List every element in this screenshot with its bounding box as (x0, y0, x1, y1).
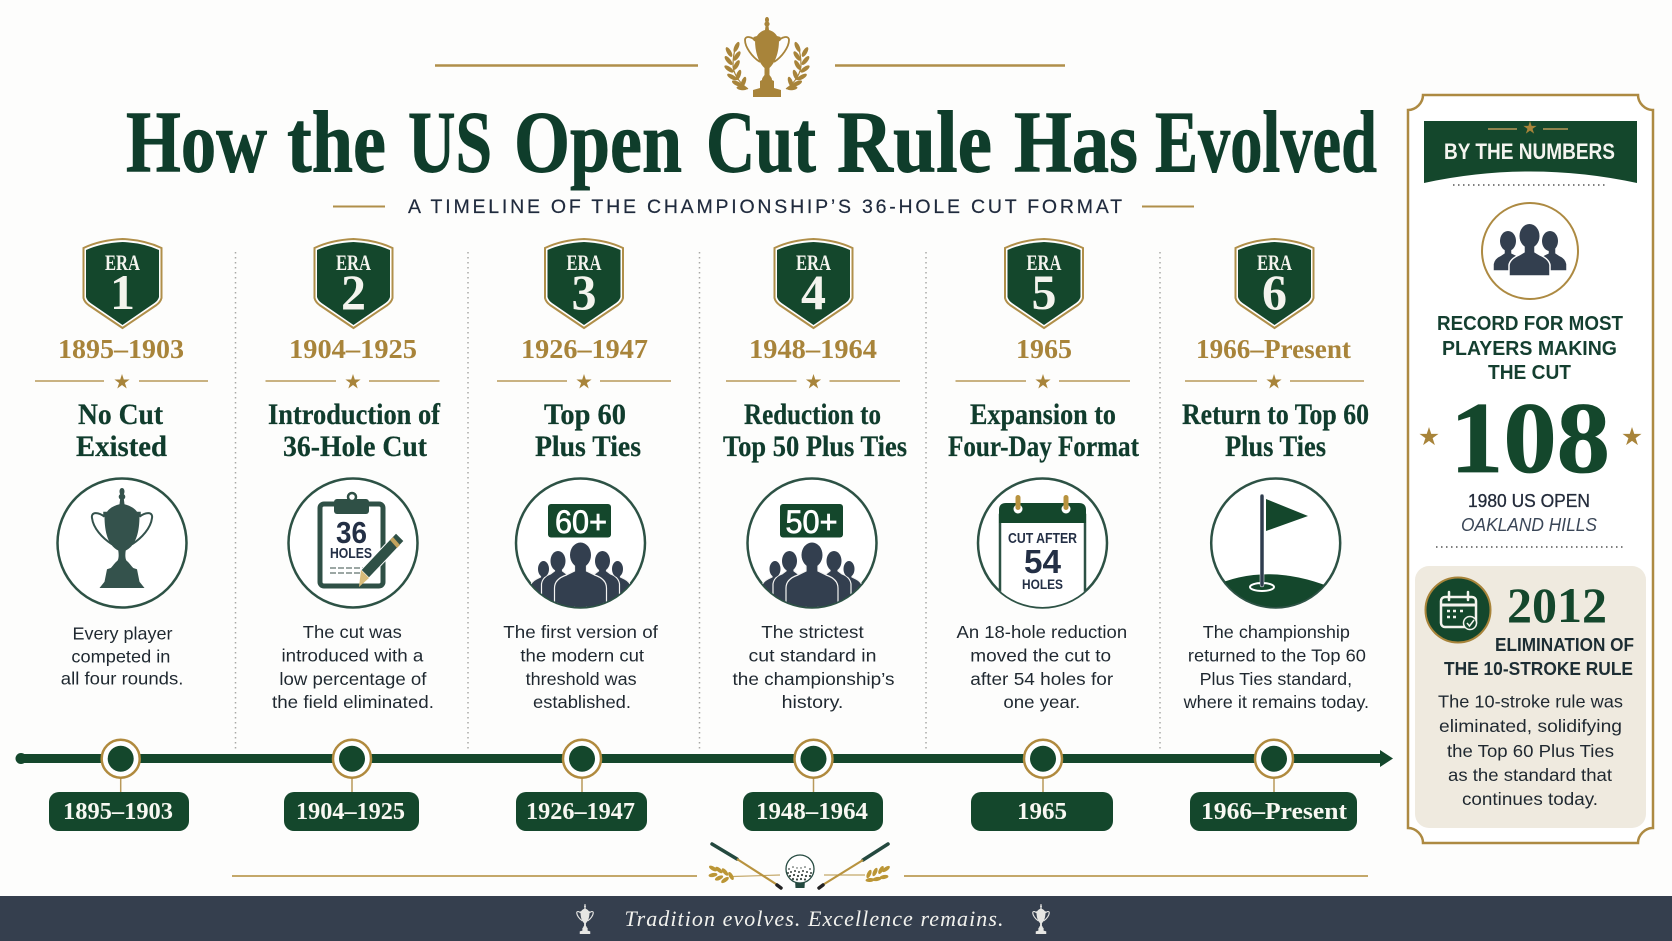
title: Evolved (1155, 94, 1377, 192)
icon: calendar check (1426, 578, 1490, 642)
era 5 description: one year. (1003, 692, 1080, 712)
era 1 shield badge: ERA (105, 250, 140, 275)
era 1 description: all four rounds. (61, 668, 183, 688)
callout text: continues today. (1462, 789, 1598, 809)
era 2 description: The cut was (303, 622, 402, 642)
title: Rule (837, 94, 992, 192)
era 2 description: the field eliminated. (272, 692, 434, 712)
timeline arrow with nodes and date pills (16, 740, 1393, 831)
era 2 shield badge: 2 (341, 264, 366, 320)
icon: footer trophy right (1033, 904, 1049, 934)
era 5 shield badge (1005, 239, 1083, 328)
era 5 shield badge: ERA (1026, 250, 1062, 275)
callout text: The 10-stroke rule was (1438, 692, 1623, 712)
era 4 shield badge: 4 (801, 264, 826, 320)
panel: era 2 (266, 239, 441, 712)
era 5 shield badge: 5 (1032, 264, 1056, 320)
era 4 heading: Top 50 Plus Ties (723, 431, 907, 463)
era 4 description: cut standard in (748, 646, 876, 666)
callout text: eliminated, solidifying (1439, 716, 1622, 736)
record location: OAKLAND HILLS (1461, 514, 1598, 535)
era 2 description: low percentage of (279, 669, 427, 689)
callout text (1438, 692, 1623, 809)
era 1 description (61, 624, 183, 688)
2012 year: 2012 (1507, 577, 1607, 633)
era 5 date: 1965 (1016, 334, 1072, 364)
era 6 star divider (1185, 374, 1364, 388)
title: Has (1014, 94, 1138, 192)
era 3 description: established. (533, 692, 631, 712)
era 3 description: threshold was (526, 669, 637, 689)
icon: calendar cut after 54 holes: HOLES (1022, 576, 1063, 592)
era 2 description (272, 622, 434, 712)
era 4 description: the championship’s (732, 669, 895, 689)
timeline node 5 (1024, 740, 1062, 792)
icon: clipboard 36 holes: HOLES (330, 545, 372, 562)
era 4 heading (723, 399, 907, 463)
timeline node 2 (333, 740, 371, 792)
title: How (126, 94, 267, 192)
record location (1461, 490, 1598, 535)
date pill 6: 1966–Present (1201, 799, 1347, 825)
icon: 60+ crowd: 60+ (555, 504, 607, 540)
date pill 5 (971, 792, 1113, 831)
callout heading: THE 10-STROKE RULE (1444, 658, 1633, 679)
title (126, 94, 1377, 192)
icon: golf flag on green (1205, 478, 1345, 615)
era 2 heading: 36-Hole Cut (283, 431, 427, 463)
era 6 description: Plus Ties standard, (1200, 669, 1352, 689)
panel: era 4 (723, 239, 907, 712)
era 1 description: competed in (71, 646, 170, 666)
era 3 shield badge: 3 (572, 264, 596, 320)
era 6 description: where it remains today. (1183, 692, 1369, 712)
callout heading (1444, 634, 1634, 679)
era 4 shield badge (774, 239, 852, 328)
panel: era 1 (35, 239, 208, 688)
date pill 2: 1904–1925 (296, 799, 405, 825)
record label: PLAYERS MAKING (1442, 338, 1617, 360)
era 6 heading: Return to Top 60 (1182, 399, 1369, 431)
record location: 1980 US OPEN (1468, 490, 1590, 511)
panel: era 5 (948, 239, 1139, 712)
record label (1437, 313, 1623, 384)
icon: golf ball on tee (786, 855, 814, 888)
era 4 description: The strictest (761, 622, 864, 642)
date pill 5: 1965 (1017, 799, 1067, 825)
icon: calendar cut after 54 holes: CUT AFTER (1008, 531, 1077, 547)
era 4 shield badge: ERA (796, 250, 831, 275)
timeline node 4 (794, 740, 832, 792)
record label: RECORD FOR MOST (1437, 313, 1623, 335)
date pill 1 (49, 792, 189, 831)
icon: trophy (58, 478, 186, 608)
era 4 star divider (726, 374, 900, 388)
era 2 description: introduced with a (282, 646, 424, 666)
icon: calendar cut after 54 holes (978, 478, 1107, 615)
date pill 2 (284, 792, 419, 831)
icon: 60+ crowd (516, 478, 645, 612)
era 1 shield badge (84, 239, 162, 328)
era 4 description: history. (782, 692, 843, 712)
arrow: timeline bar (16, 750, 1393, 767)
callout text: the Top 60 Plus Ties (1447, 741, 1614, 761)
era 5 description: after 54 holes for (970, 669, 1113, 689)
era 4 heading: Reduction to (744, 399, 881, 431)
era 5 heading: Expansion to (970, 399, 1116, 431)
icon: clipboard 36 holes (288, 478, 418, 608)
golf ornament: crossed clubs and ball (232, 844, 1368, 888)
footer tagline: Tradition evolves. Excellence remains. (624, 906, 1004, 931)
era 6 shield badge: 6 (1262, 264, 1287, 320)
big number 108 with stars (1419, 382, 1642, 495)
icon: 50+ crowd: 50+ (786, 504, 838, 540)
date pill 4: 1948–1964 (756, 799, 868, 825)
era 3 heading: Plus Ties (535, 431, 641, 463)
date pill 4 (743, 792, 883, 831)
date pill 6 (1190, 792, 1357, 831)
icon: footer trophy left (577, 904, 593, 934)
icon: 50+ crowd (748, 478, 876, 612)
era 3 description: the modern cut (520, 646, 644, 666)
panel: era 6 (1182, 239, 1369, 712)
era 3 shield badge (545, 239, 623, 328)
record label: THE CUT (1488, 362, 1571, 384)
panel: 2012 callout (1415, 566, 1646, 828)
footer band (0, 896, 1672, 941)
era 3 shield badge: ERA (566, 250, 602, 275)
big number 108 with stars: 108 (1450, 382, 1610, 495)
era 4 dates: 1948–1964 (749, 334, 877, 364)
era 3 star divider (497, 374, 671, 388)
era 5 star divider (956, 374, 1130, 388)
era 1 heading: No Cut (78, 399, 163, 431)
era 1 shield badge: 1 (110, 264, 135, 320)
era 1 description: Every player (72, 624, 173, 644)
callout heading: ELIMINATION OF (1495, 634, 1634, 655)
era 6 dates: 1966–Present (1196, 334, 1351, 364)
era 1 star divider (35, 374, 208, 388)
era 6 description: returned to the Top 60 (1188, 646, 1366, 666)
era 3 description: The first version of (503, 622, 658, 642)
era 6 heading: Plus Ties (1225, 431, 1326, 463)
date pill 3 (516, 792, 647, 831)
title: Cut (706, 94, 816, 192)
era 2 shield badge (314, 239, 392, 328)
era 5 description (956, 622, 1127, 712)
timeline node 3 (563, 740, 601, 792)
timeline node 1 (102, 740, 140, 792)
era 5 description: moved the cut to (970, 646, 1111, 666)
era 3 dates: 1926–1947 (521, 334, 648, 364)
era 1 dates: 1895–1903 (58, 334, 184, 364)
date pill 1: 1895–1903 (63, 799, 173, 825)
era 6 shield badge (1236, 239, 1314, 328)
panel: by the numbers sidebar (1408, 95, 1653, 843)
era 2 shield badge: ERA (336, 250, 371, 275)
callout text: as the standard that (1448, 765, 1612, 785)
era 2 heading: Introduction of (268, 399, 441, 431)
title: the (287, 94, 386, 192)
era 5 heading: Four-Day Format (948, 431, 1139, 463)
icon: calendar cut after 54 holes: 54 (1024, 543, 1062, 580)
title: US (408, 94, 492, 192)
title: Open (514, 94, 682, 192)
era 6 description (1183, 622, 1369, 712)
header ornament: gold trophy with laurels (435, 17, 1065, 97)
date pill 3: 1926–1947 (526, 799, 635, 825)
era 5 heading (948, 399, 1139, 463)
era 6 shield badge: ERA (1257, 250, 1292, 275)
era 2 heading (268, 399, 441, 463)
era 1 heading (76, 399, 168, 463)
era 4 description (732, 622, 895, 712)
era 2 star divider (266, 374, 440, 388)
era 3 heading: Top 60 (544, 399, 626, 431)
era 6 heading (1182, 399, 1369, 463)
era 3 heading (535, 399, 641, 463)
era 6 description: The championship (1203, 622, 1350, 642)
era 1 heading: Existed (76, 431, 168, 463)
icon: players group (1482, 203, 1578, 299)
era 5 description: An 18-hole reduction (956, 622, 1127, 642)
era 3 description (503, 622, 658, 712)
icon: clipboard 36 holes: 36 (336, 515, 367, 550)
timeline node 6 (1255, 740, 1293, 792)
sidebar banner: BY THE NUMBERS (1444, 139, 1615, 164)
subtitle: A TIMELINE OF THE CHAMPIONSHIP’S 36-HOLE CUT FORMAT (408, 196, 1122, 218)
panel: era 3 (497, 239, 671, 712)
era 2 dates: 1904–1925 (289, 334, 417, 364)
sidebar banner (1424, 121, 1637, 183)
